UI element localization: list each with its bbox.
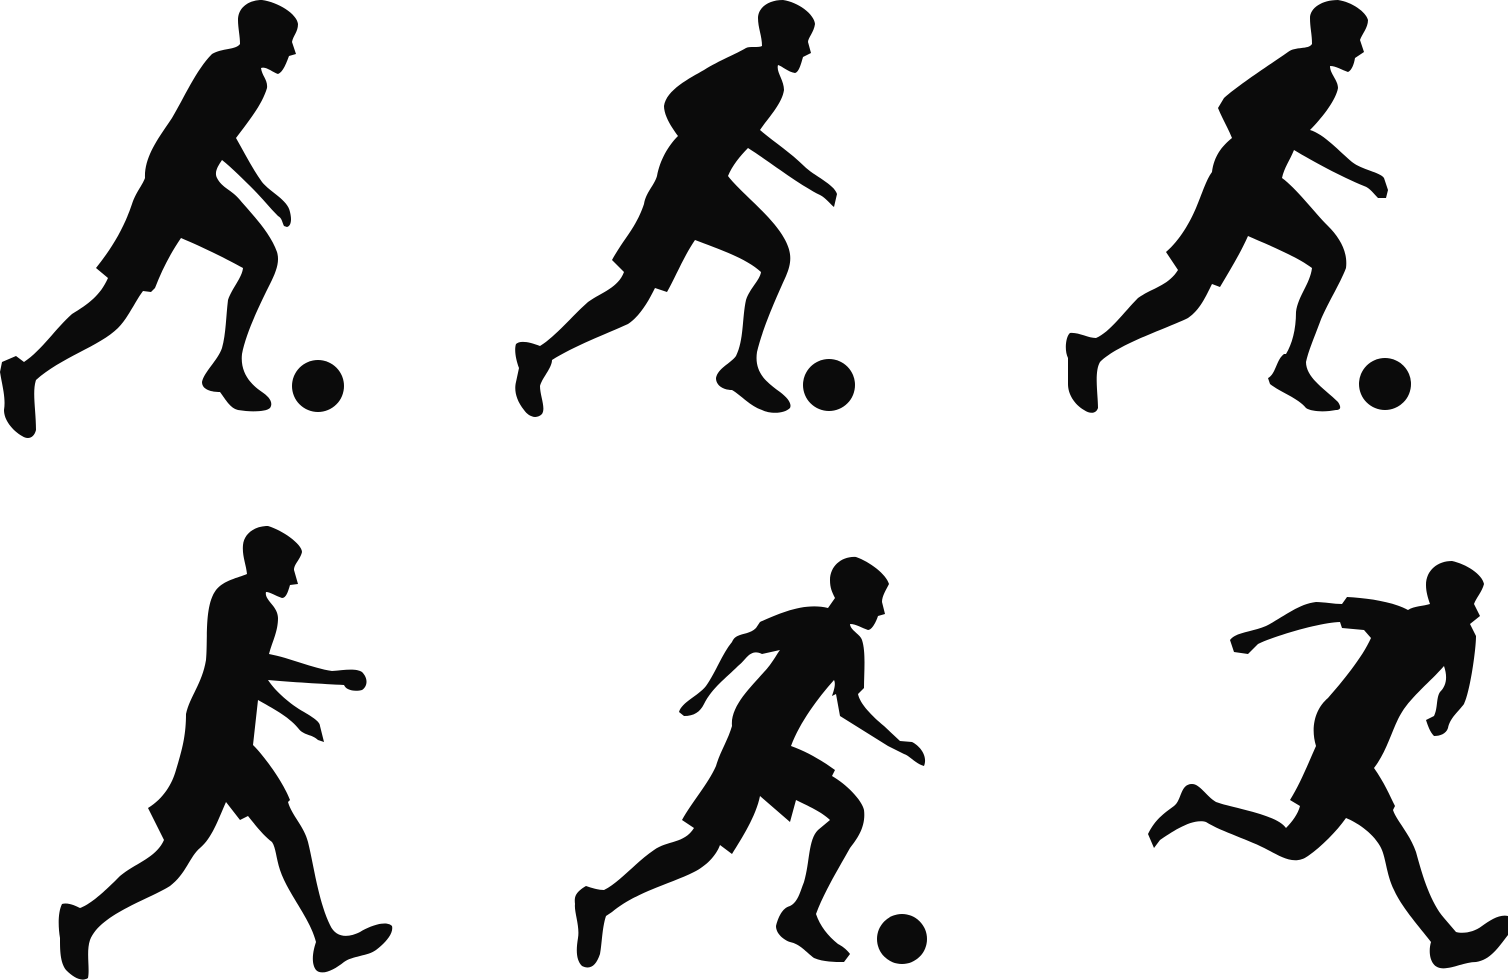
figure 6: player kicking, bottom right (1148, 561, 1508, 968)
figure 2: player dribbling, top centre (515, 0, 855, 417)
ball 4 (877, 914, 927, 964)
ball 1 (292, 360, 344, 412)
ball 2 (803, 359, 855, 411)
figure 5: player dribbling, bottom centre (575, 557, 927, 968)
figure 4: player running, bottom left (59, 526, 392, 980)
figure 1: player dribbling, top left (0, 0, 344, 438)
ball 3 (1359, 358, 1411, 410)
figure 3: player dribbling, top right (1066, 0, 1411, 413)
